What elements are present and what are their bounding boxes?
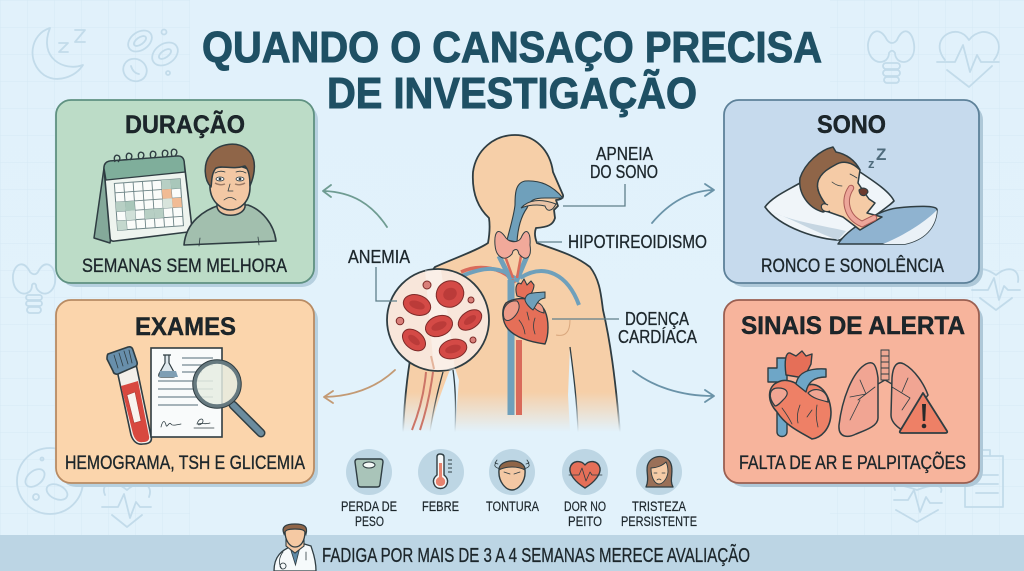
title [202, 23, 822, 118]
symptom: tontura [486, 449, 539, 514]
label: apneia do sono: DO SONO [590, 162, 658, 182]
panel: duração [56, 100, 318, 287]
decorative icon: clipboard [965, 450, 1003, 507]
icon: calendar [94, 149, 192, 243]
label: hipotireoidismo: HIPOTIREOIDISMO [568, 232, 707, 252]
label: apneia do sono [590, 144, 658, 182]
symptom: febre [418, 449, 464, 514]
connector: doença cardíaca [552, 318, 619, 320]
symptom: perda de peso [341, 449, 397, 529]
arrow: to duração [323, 185, 387, 227]
inner arm lines [430, 347, 578, 432]
label: doença cardíaca: DOENÇA [625, 309, 689, 329]
symptom: perda de peso: PERDA DE [341, 499, 397, 514]
text: ronco e sonolência: RONCO E SONOLÊNCIA [761, 254, 944, 277]
symptom: tristeza persistente: PERSISTENTE [621, 514, 697, 529]
symptom: tontura: TONTURA [486, 499, 539, 514]
heading: duração: DURAÇÃO [125, 109, 245, 139]
icon: doctor [274, 524, 316, 571]
decorative icon: heart bottom right [894, 486, 942, 522]
decorative icon: heart bottom left [102, 483, 151, 527]
symptom: febre: FEBRE [422, 499, 459, 514]
decorative icon: cell circle [17, 448, 83, 514]
icon: lab report [151, 348, 222, 437]
heading: sinais de alerta: SINAIS DE ALERTA [741, 312, 965, 340]
icon: heart [768, 351, 831, 439]
central body figure [387, 135, 620, 432]
symptom: tristeza persistente: TRISTEZA [632, 499, 686, 514]
heading: exames: EXAMES [135, 313, 236, 341]
panel: sinais de alerta [724, 300, 983, 487]
icon: sleeping man: Z [876, 145, 886, 164]
tired face details [215, 171, 246, 200]
left grid pattern [0, 0, 190, 535]
icon: warning triangle [900, 393, 947, 433]
text: semanas sem melhora: SEMANAS SEM MELHORA [82, 255, 287, 277]
central heart [503, 279, 548, 344]
symptom: dor no peito: DOR NO [564, 499, 606, 514]
label: doença cardíaca: CARDÍACA [618, 327, 697, 347]
label: anemia: ANEMIA [348, 247, 410, 267]
connector: anemia [376, 267, 397, 301]
decorative icon: heart right [972, 269, 1020, 310]
text: banner message: FADIGA POR MAIS DE 3 A 4 SEMANAS MERECE AVALIAÇÃO [322, 543, 750, 567]
icon: tired person [184, 144, 276, 246]
decorative icon: moon and zzz [33, 28, 85, 79]
heading: sono: SONO [817, 111, 886, 139]
body silhouette [403, 135, 620, 432]
symptom: tristeza persistente [621, 449, 697, 529]
icon: sleeping man [765, 145, 937, 244]
icon: lungs [839, 350, 947, 436]
arrow: to sono [652, 184, 714, 223]
symptom: perda de peso: PESO [355, 514, 384, 529]
blood vessels [412, 256, 579, 430]
panel: sono [724, 100, 983, 287]
decorative icon: thyroid top right [868, 31, 914, 83]
icon: magnifying glass [193, 360, 261, 433]
thyroid [495, 232, 530, 258]
symptom: dor no peito [562, 449, 608, 529]
arrow: to sinais de alerta [633, 371, 714, 402]
label: doença cardíaca [618, 309, 697, 347]
decorative icon: heart top right [937, 32, 999, 87]
connector: apneia [563, 184, 625, 206]
anemia magnifier circle [387, 269, 489, 371]
icon: blood tube [107, 347, 151, 444]
bottom banner [0, 524, 1024, 571]
decorative icon: blood cells [119, 26, 182, 86]
text: falta de ar e palpitações: FALTA DE AR E PALPITAÇÕES [739, 450, 966, 474]
airway [507, 181, 563, 242]
decorative icon: thyroid left [13, 264, 55, 313]
icon: sleeping man: z [868, 156, 875, 171]
title: DE INVESTIGAÇÃO [327, 68, 697, 118]
label: apneia do sono: APNEIA [596, 144, 653, 164]
right grid pattern [830, 0, 1024, 535]
arrow: to exames [324, 370, 395, 403]
title: QUANDO O CANSAÇO PRECISA [202, 23, 822, 72]
symptom: dor no peito: PEITO [568, 514, 602, 529]
panel: exames [56, 300, 318, 487]
connector: hipotireoidismo [537, 241, 562, 243]
text: hemograma: HEMOGRAMA, TSH E GLICEMIA [65, 452, 305, 474]
